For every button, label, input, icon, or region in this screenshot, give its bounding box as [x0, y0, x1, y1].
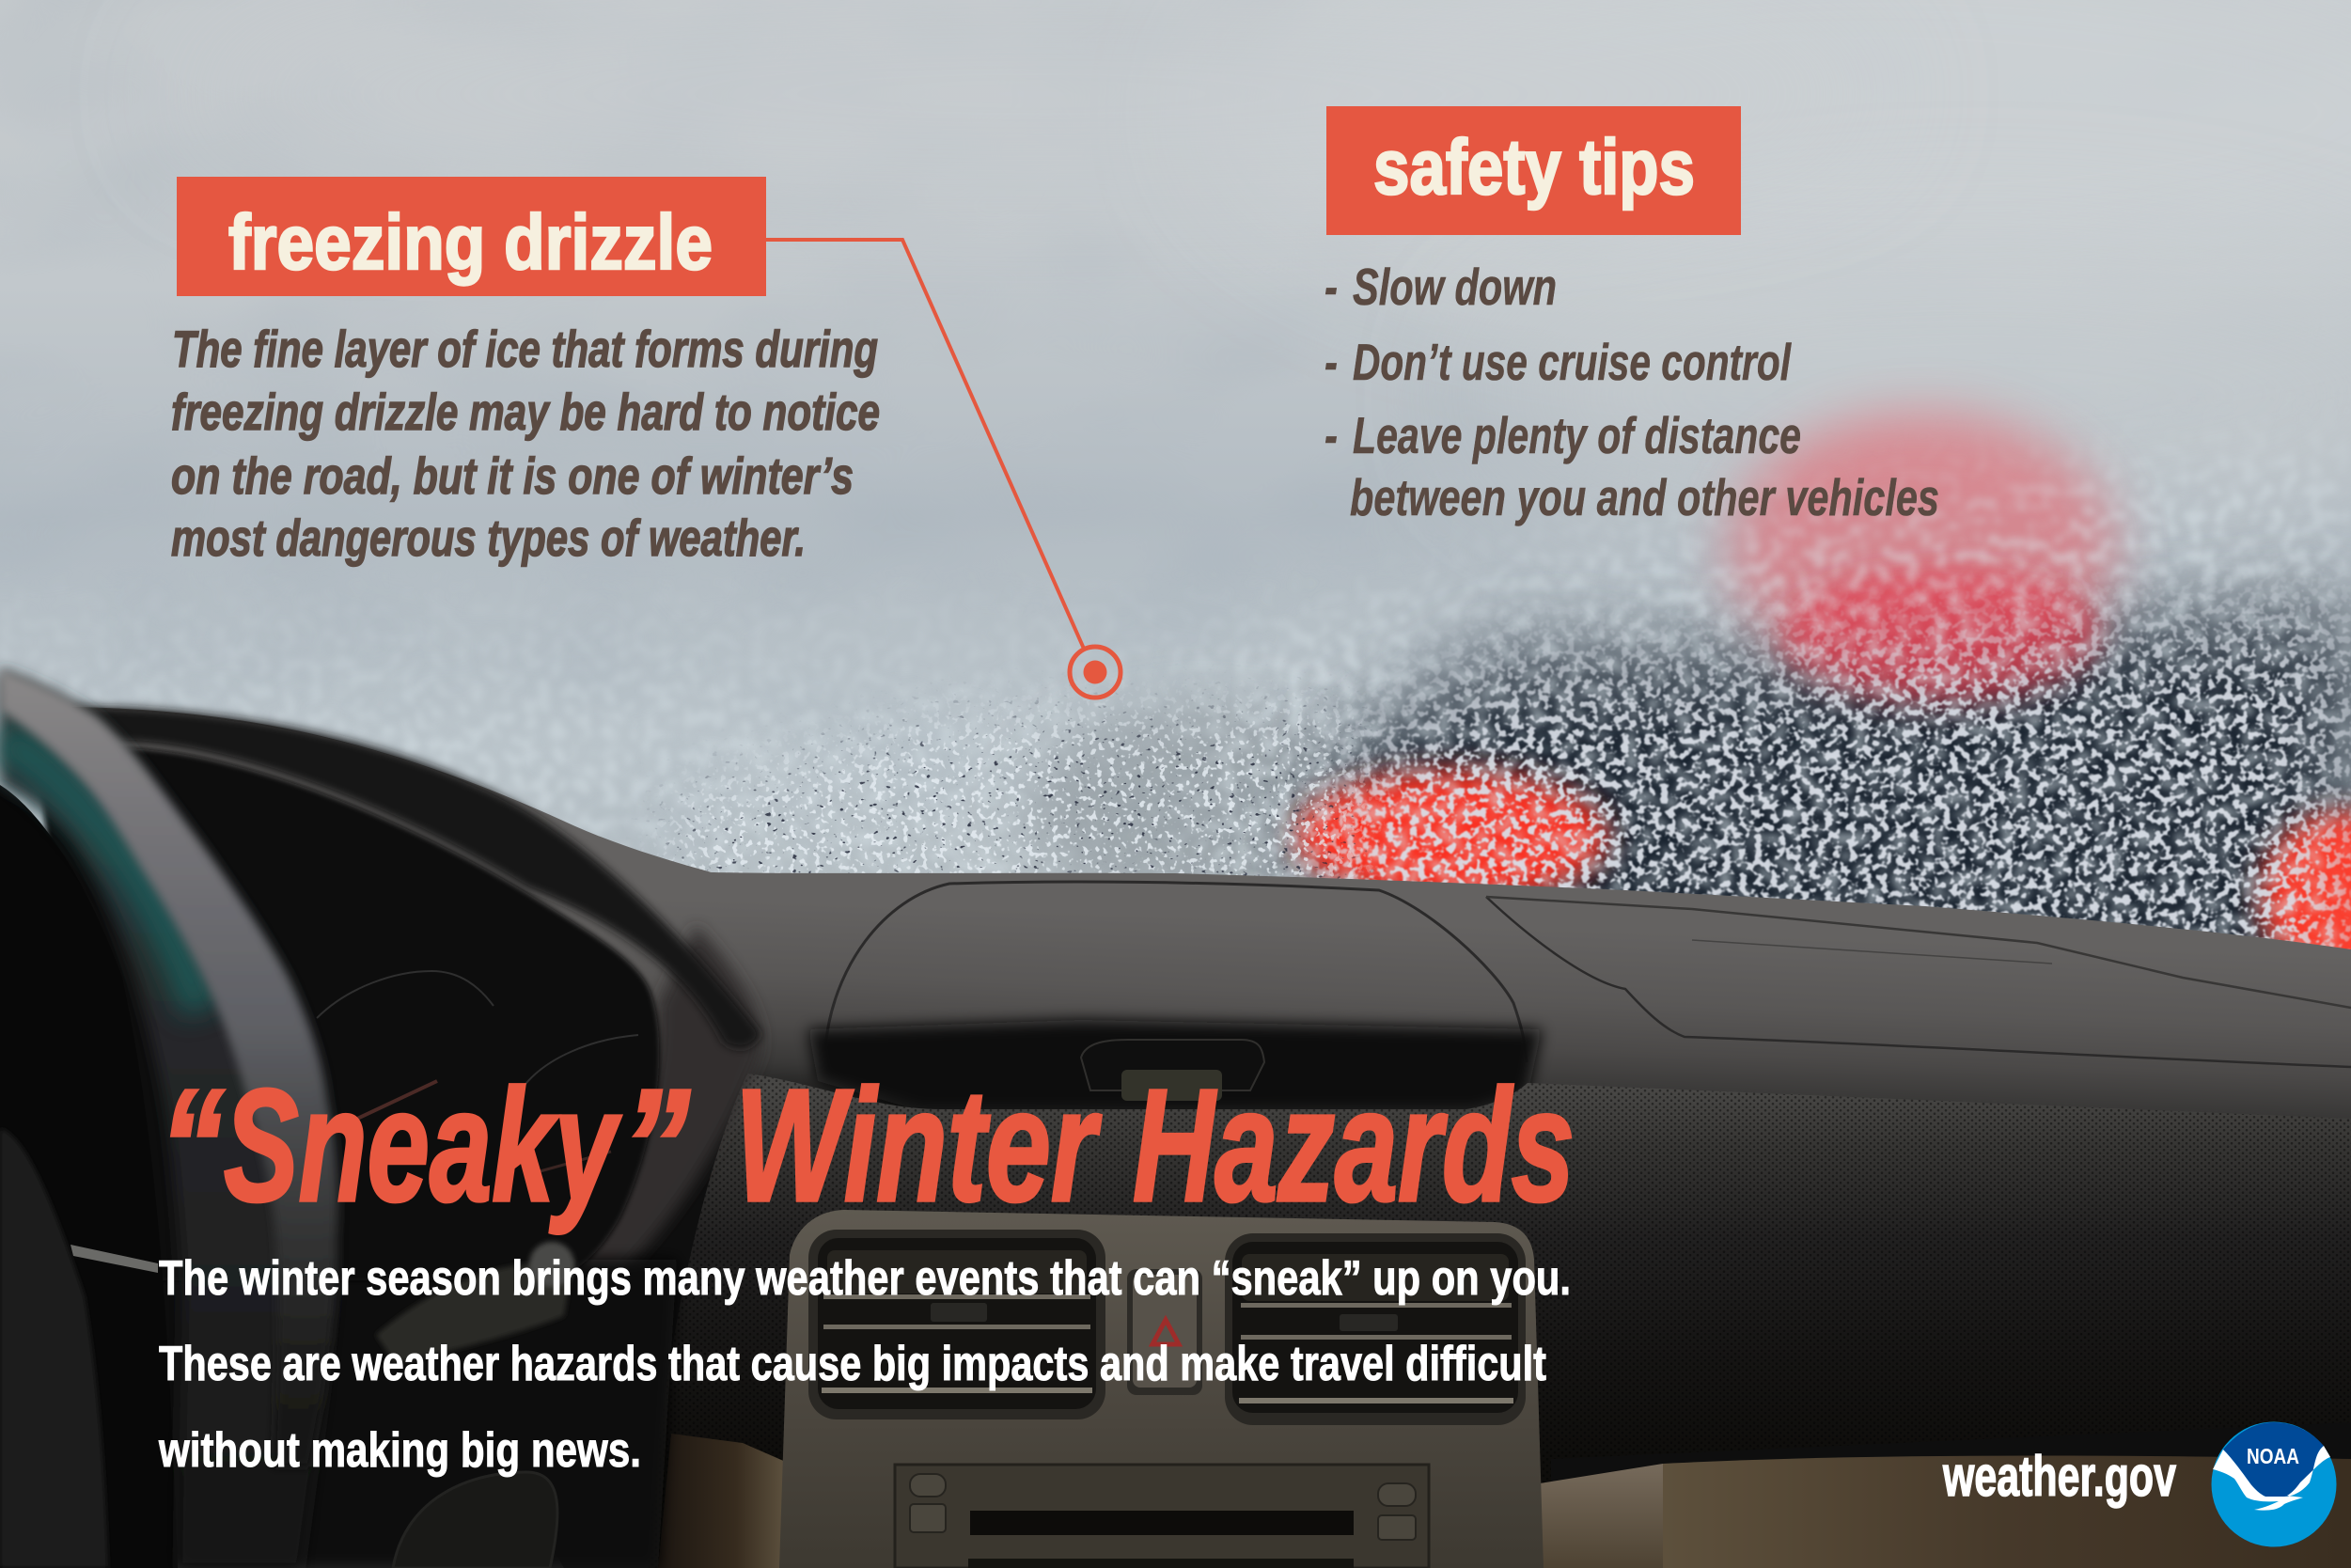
- red tail light blur: upper right: [1730, 414, 2115, 700]
- wheel grey rim: [0, 669, 337, 1466]
- heading box: freezing drizzle: [177, 177, 766, 296]
- heading box: freezing drizzle: freezing drizzle: [228, 198, 713, 286]
- NOAA logo: NOAA: [2247, 1444, 2299, 1468]
- dashboard top panel: [72, 707, 2351, 1568]
- description text: freezing drizzle may be hard to notice: [171, 383, 880, 441]
- radio unit: [895, 1465, 1429, 1568]
- callout leader line: [766, 240, 1084, 649]
- lower column area: [94, 1260, 677, 1568]
- safety tips list: -: [1324, 258, 1338, 316]
- intro paragraph: These are weather hazards that cause big impacts and make travel difficult: [159, 1337, 1546, 1391]
- heading box: safety tips: [1326, 106, 1741, 235]
- tan lower panel middle: [1540, 1464, 1663, 1568]
- intro paragraph: The winter season brings many weather events that can “sneak” up on you.: [159, 1251, 1571, 1306]
- safety tips list: [1324, 258, 1939, 526]
- dark recess under hood: [808, 1020, 1542, 1111]
- wheel hollow: [0, 785, 178, 1568]
- hazard button: [1127, 1269, 1202, 1395]
- center console: [779, 1210, 1544, 1568]
- website label: weather.gov: [1942, 1445, 2176, 1508]
- cluster bezel: [508, 926, 761, 1307]
- intro paragraph: [158, 1251, 1571, 1478]
- wheel teal reflection: [0, 738, 202, 1011]
- safety tips list: Slow down: [1353, 258, 1557, 316]
- title: [160, 1057, 1575, 1235]
- safety tips list: between you and other vehicles: [1350, 468, 1939, 526]
- wheel rim inner: [0, 669, 337, 1568]
- description text: [171, 320, 880, 567]
- safety tips list: -: [1324, 406, 1338, 464]
- clock display: [1121, 1070, 1222, 1101]
- description text: The fine layer of ice that forms during: [172, 320, 878, 378]
- horn stalk: [71, 1245, 158, 1273]
- dotted panel right: [649, 1074, 2351, 1568]
- left air vent: [808, 1230, 1105, 1419]
- title: Winter: [735, 1057, 1102, 1235]
- tan lower panel right: [1663, 1455, 2351, 1568]
- heading box: safety tips: safety tips: [1373, 123, 1695, 211]
- callout target marker: [1070, 647, 1121, 698]
- background: frosted windshield: [0, 0, 2351, 996]
- stalks: [376, 1242, 574, 1568]
- title: Sneaky: [224, 1057, 621, 1235]
- hood outer band: [56, 707, 761, 1048]
- wheel hub: [0, 1128, 108, 1568]
- title: ”: [622, 1057, 690, 1235]
- description text: on the road, but it is one of winter’s: [171, 447, 854, 505]
- glovebox seams: [825, 882, 2351, 1067]
- red tail light blur: lower center: [1297, 771, 1607, 902]
- tan lower panel left: [658, 1434, 788, 1568]
- title: “: [160, 1057, 224, 1235]
- instrument cluster recess: [38, 748, 660, 1280]
- handle: [1081, 1040, 1264, 1090]
- title: Hazards: [1133, 1057, 1575, 1235]
- intro paragraph: without making big news.: [158, 1423, 641, 1478]
- right air vent: [1225, 1233, 1526, 1425]
- steering wheel: [0, 669, 337, 1568]
- gauges: [9, 971, 638, 1175]
- safety tips list: Leave plenty of distance: [1353, 406, 1801, 464]
- dashboard: [0, 669, 2351, 1568]
- description text: most dangerous types of weather.: [171, 509, 806, 567]
- NOAA logo: [2211, 1421, 2337, 1547]
- safety tips list: Don’t use cruise control: [1353, 333, 1792, 391]
- safety tips list: -: [1324, 333, 1338, 391]
- red tail light blur: far right: [2261, 813, 2351, 982]
